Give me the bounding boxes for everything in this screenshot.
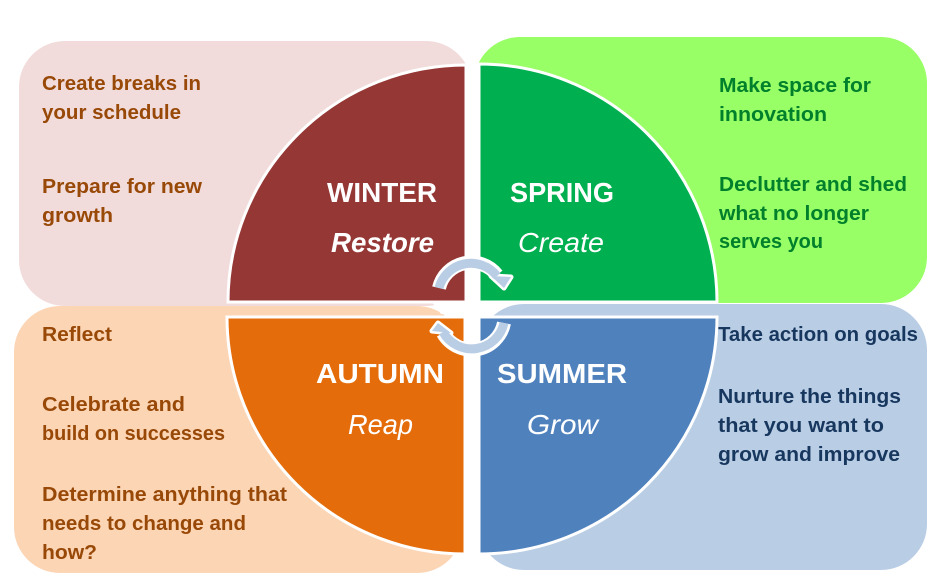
- winter quadrant: [228, 65, 466, 302]
- summer heading: SUMMER: [497, 358, 627, 389]
- autumn text block: [42, 324, 287, 564]
- winter text block: Create breaks in: [42, 73, 201, 95]
- spring background panel: [474, 37, 927, 303]
- spring text block: Declutter and shed: [719, 174, 907, 196]
- summer text block: [718, 324, 918, 466]
- section: summer: [476, 304, 927, 570]
- autumn text block: needs to change and: [42, 513, 246, 535]
- summer background panel: [478, 304, 927, 570]
- winter heading: WINTER: [327, 177, 437, 208]
- winter text block: Prepare for new: [42, 176, 202, 198]
- autumn text block: Determine anything that: [42, 484, 287, 506]
- spring quadrant: [479, 64, 717, 302]
- autumn text block: Reflect: [42, 324, 112, 346]
- spring subtitle: Create: [518, 227, 604, 258]
- summer text block: Nurture the things: [718, 386, 901, 408]
- autumn heading: AUTUMN: [316, 358, 444, 389]
- section: autumn: [14, 304, 467, 573]
- autumn text block: build on successes: [42, 423, 225, 445]
- winter text block: your schedule: [42, 102, 181, 124]
- spring text block: innovation: [719, 104, 827, 126]
- winter text block: growth: [42, 205, 113, 227]
- spring text block: what no longer: [718, 203, 869, 225]
- icon: bottom cycle arrow: [432, 323, 504, 350]
- autumn quadrant: [227, 317, 465, 554]
- summer text block: grow and improve: [718, 444, 900, 466]
- spring heading: SPRING: [510, 177, 614, 208]
- winter text block: [42, 73, 202, 227]
- winter background panel: [19, 41, 472, 306]
- autumn background panel: [14, 306, 463, 573]
- summer subtitle: Grow: [527, 409, 600, 440]
- summer text block: Take action on goals: [718, 324, 918, 346]
- spring text block: [718, 75, 907, 253]
- spring text block: Make space for: [719, 75, 871, 97]
- icon: top cycle arrow: [439, 262, 511, 288]
- summer text block: that you want to: [718, 415, 884, 437]
- section: winter: [19, 41, 472, 306]
- winter subtitle: Restore: [331, 227, 434, 258]
- autumn subtitle: Reap: [348, 409, 413, 440]
- section: spring: [468, 37, 927, 304]
- autumn text block: how?: [42, 542, 97, 564]
- spring text block: serves you: [719, 231, 823, 253]
- summer quadrant: [479, 317, 717, 554]
- autumn text block: Celebrate and: [42, 394, 185, 416]
